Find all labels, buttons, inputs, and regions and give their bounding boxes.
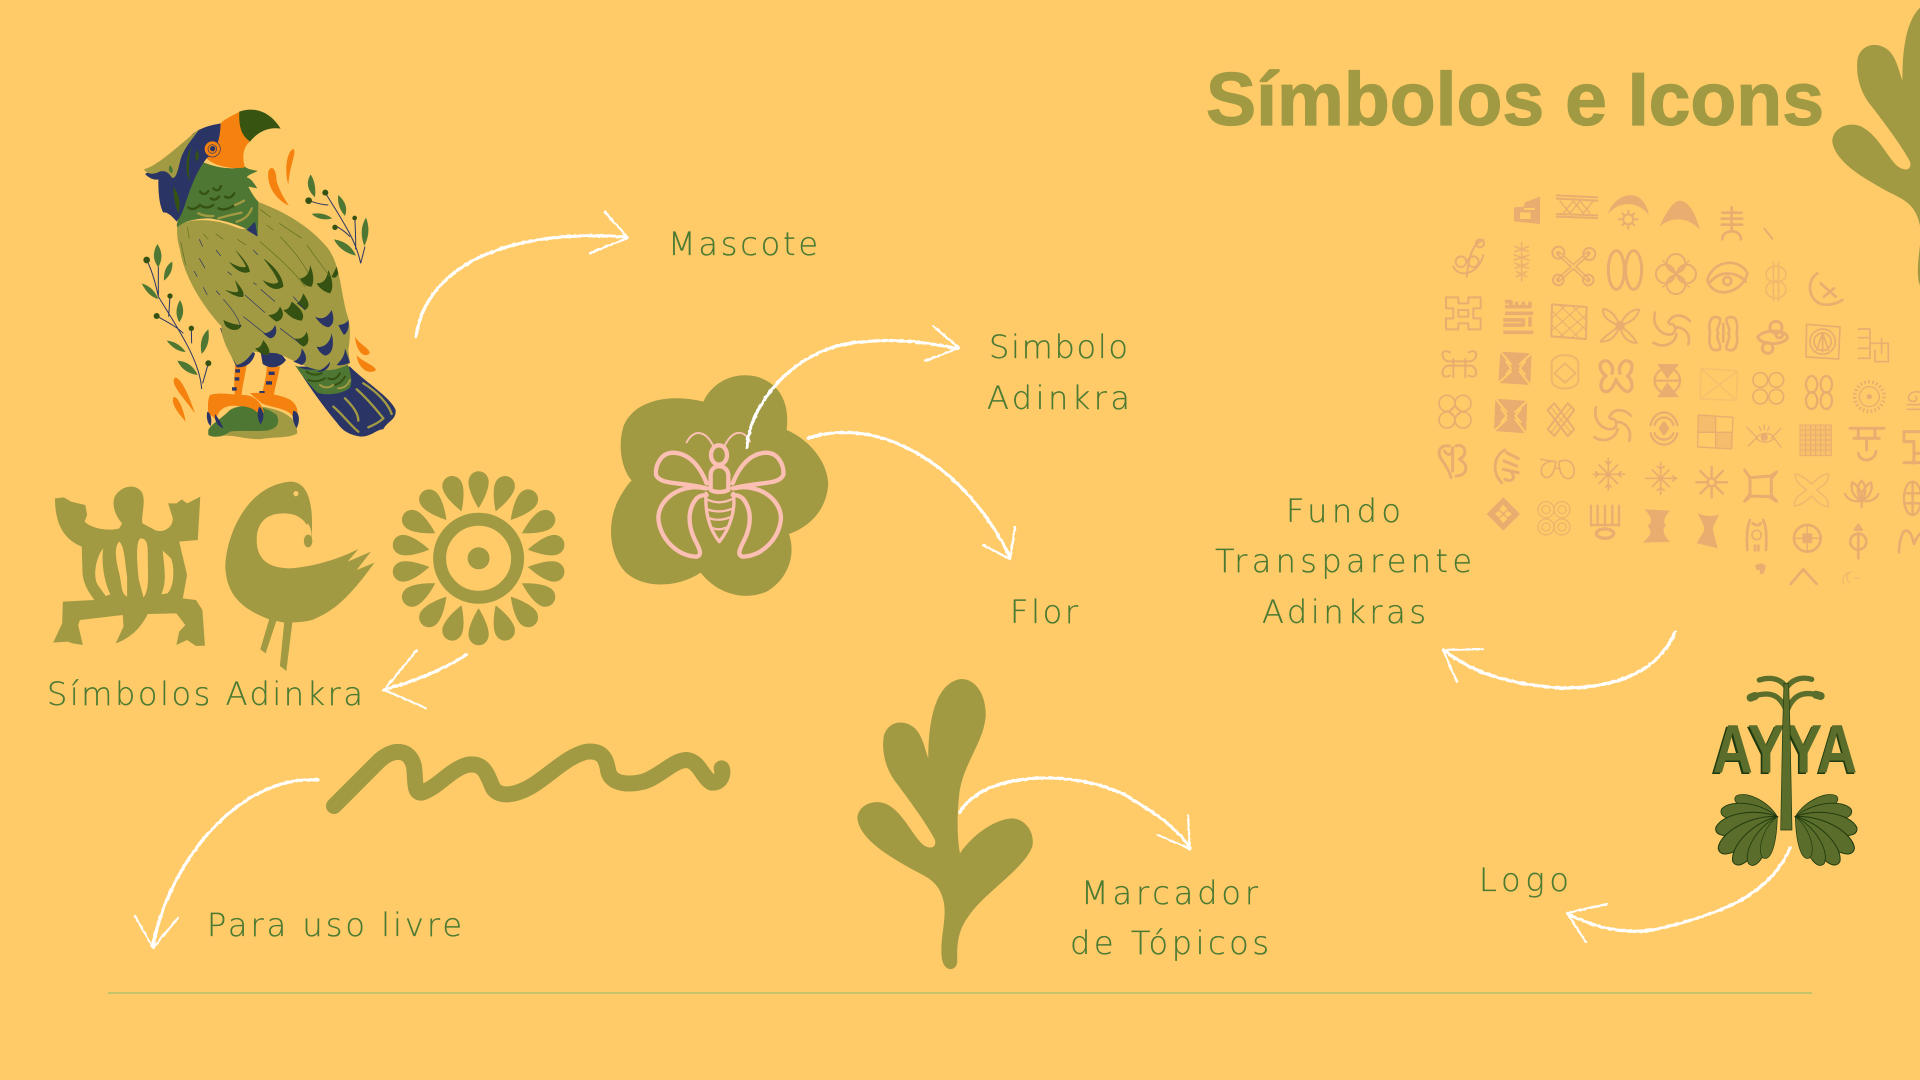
arrow: to Para uso livre xyxy=(135,780,318,948)
arrow: to Logo xyxy=(1567,848,1790,942)
body and wings xyxy=(177,202,350,370)
label: Fundo Transparente Adinkras: Fundo xyxy=(1286,492,1401,530)
icon: Adinkra sun symbol xyxy=(391,471,566,645)
icon: leaf bullet marker xyxy=(857,679,1033,969)
label: Simbolo Adinkra: Adinkra xyxy=(987,379,1130,417)
logo wordmark: AYYA xyxy=(1713,712,1857,788)
head blue xyxy=(145,123,221,222)
neck feathers xyxy=(188,186,235,209)
rump xyxy=(295,362,351,394)
tail xyxy=(297,367,396,437)
icon: freeform squiggle xyxy=(334,751,722,806)
icon: mascot bird xyxy=(142,110,396,439)
neck xyxy=(177,162,258,237)
icon: flower with pink insect symbol xyxy=(611,375,828,596)
arrow: to Marcador de Tópicos xyxy=(960,778,1190,849)
feet xyxy=(207,393,299,428)
orange flame marks xyxy=(173,149,376,422)
label: Fundo Transparente Adinkras: Adinkras xyxy=(1262,593,1426,631)
rock xyxy=(208,406,297,439)
crest xyxy=(144,128,200,178)
logo fan leaves xyxy=(1713,791,1860,870)
title: Símbolos e Icons xyxy=(1206,57,1824,141)
eye xyxy=(204,141,220,157)
label: Simbolo Adinkra: Simbolo xyxy=(989,328,1128,366)
panel: faded Adinkra symbols background xyxy=(1439,195,1920,584)
logo wordmark: AYYA xyxy=(1711,713,1856,789)
logo plant stem and sprouts xyxy=(1751,678,1821,830)
label: Para uso livre: Para uso livre xyxy=(207,906,462,944)
label: Simbolo Adinkra xyxy=(987,328,1130,417)
arrow: to Símbolos Adinkra xyxy=(384,650,466,708)
label: Símbolos Adinkra: Símbolos Adinkra xyxy=(47,675,363,713)
label: Marcador de Tópicos: de Tópicos xyxy=(1070,924,1269,962)
icon: AYYA logo xyxy=(1711,678,1860,870)
right branch xyxy=(305,174,368,263)
label: Logo: Logo xyxy=(1479,861,1569,899)
breast blue xyxy=(247,222,258,237)
arrow: to Simbolo Adinkra xyxy=(747,326,959,447)
arrow: to Flor xyxy=(808,432,1015,559)
icon: Adinkra turtle symbol xyxy=(53,487,205,646)
wing feather tips xyxy=(223,249,338,355)
arrow: to Fundo Transparente xyxy=(1443,632,1675,688)
arrow: to Mascote xyxy=(416,212,628,337)
label: Marcador de Tópicos: Marcador xyxy=(1081,874,1259,912)
icon: decorative leaf, top right xyxy=(1830,0,1920,292)
label: Flor: Flor xyxy=(1010,593,1079,631)
icon: Sankofa bird symbol xyxy=(225,482,375,671)
label: Mascote: Mascote xyxy=(668,225,818,263)
legs and thighs xyxy=(220,328,286,398)
arrows: white chalk lines xyxy=(135,212,1790,948)
beak xyxy=(239,110,281,142)
face xyxy=(207,112,250,168)
label: Fundo Transparente Adinkras: Transparente xyxy=(1215,542,1472,580)
label: Marcador de Tópicos xyxy=(1070,874,1269,962)
label: Fundo Transparente Adinkras xyxy=(1215,492,1472,631)
left branch xyxy=(142,244,211,389)
